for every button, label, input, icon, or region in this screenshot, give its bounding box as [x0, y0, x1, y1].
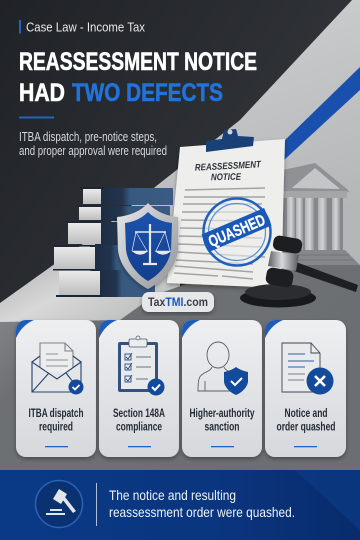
card 4: Notice and order quashed — [265, 320, 346, 457]
clipboard clip — [206, 129, 254, 152]
icon: check badge — [148, 378, 164, 396]
title: HAD — [19, 79, 65, 107]
label: compliance — [116, 422, 162, 434]
card 3: Higher-authority sanction — [182, 320, 262, 457]
quashed stamp: QUASHED — [206, 212, 268, 251]
subtitle: ITBA dispatch, pre-notice steps, — [19, 130, 157, 144]
paper text lines — [174, 188, 265, 279]
footer text — [109, 487, 295, 520]
gavel — [240, 235, 358, 308]
title: REASSESSMENT NOTICE — [19, 48, 257, 76]
icon: gavel circle — [36, 480, 82, 528]
scales icon — [132, 224, 171, 264]
icon: cross badge — [306, 368, 334, 394]
shield with scales — [117, 203, 178, 289]
title: TWO DEFECTS — [72, 79, 223, 107]
title rule — [19, 116, 54, 118]
label: Higher-authority — [190, 408, 255, 420]
icon: person — [198, 342, 232, 391]
subtitle: and proper approval were required — [19, 144, 167, 158]
icon: checklist clipboard — [118, 336, 158, 392]
footer banner — [0, 470, 360, 540]
label: required — [39, 422, 73, 434]
label — [190, 408, 255, 434]
TaxTMI logo pill: TaxTMI.com — [148, 297, 208, 309]
icon: check badge — [68, 380, 84, 394]
tag line: Case Law - Income Tax — [26, 20, 145, 34]
footer text: reassessment order were quashed. — [109, 504, 295, 520]
footer text: The notice and resulting — [109, 487, 236, 503]
label — [113, 408, 165, 434]
blue diagonal stripe — [283, 67, 360, 161]
icon: envelope — [32, 343, 81, 392]
label: sanction — [204, 422, 240, 434]
card 2: Section 148A — [99, 320, 179, 457]
courthouse — [283, 163, 360, 265]
paper heading: NOTICE — [211, 172, 242, 183]
paper heading: REASSESSMENT — [195, 159, 262, 174]
title — [19, 48, 257, 107]
subtitle — [19, 130, 167, 158]
quashed stamp — [201, 198, 272, 266]
books stack — [53, 187, 173, 297]
TaxTMI logo pill — [142, 292, 214, 312]
label: Notice and — [284, 408, 328, 420]
label: Section 148A — [113, 408, 165, 420]
label — [28, 408, 84, 434]
label: order quashed — [276, 422, 336, 434]
icon: document — [282, 343, 320, 392]
label — [276, 408, 336, 434]
notice paper — [167, 129, 285, 288]
icon: shield badge — [224, 367, 248, 395]
card 1: ITBA dispatch — [16, 320, 96, 457]
label: ITBA dispatch — [28, 408, 84, 420]
paper heading — [195, 159, 262, 183]
